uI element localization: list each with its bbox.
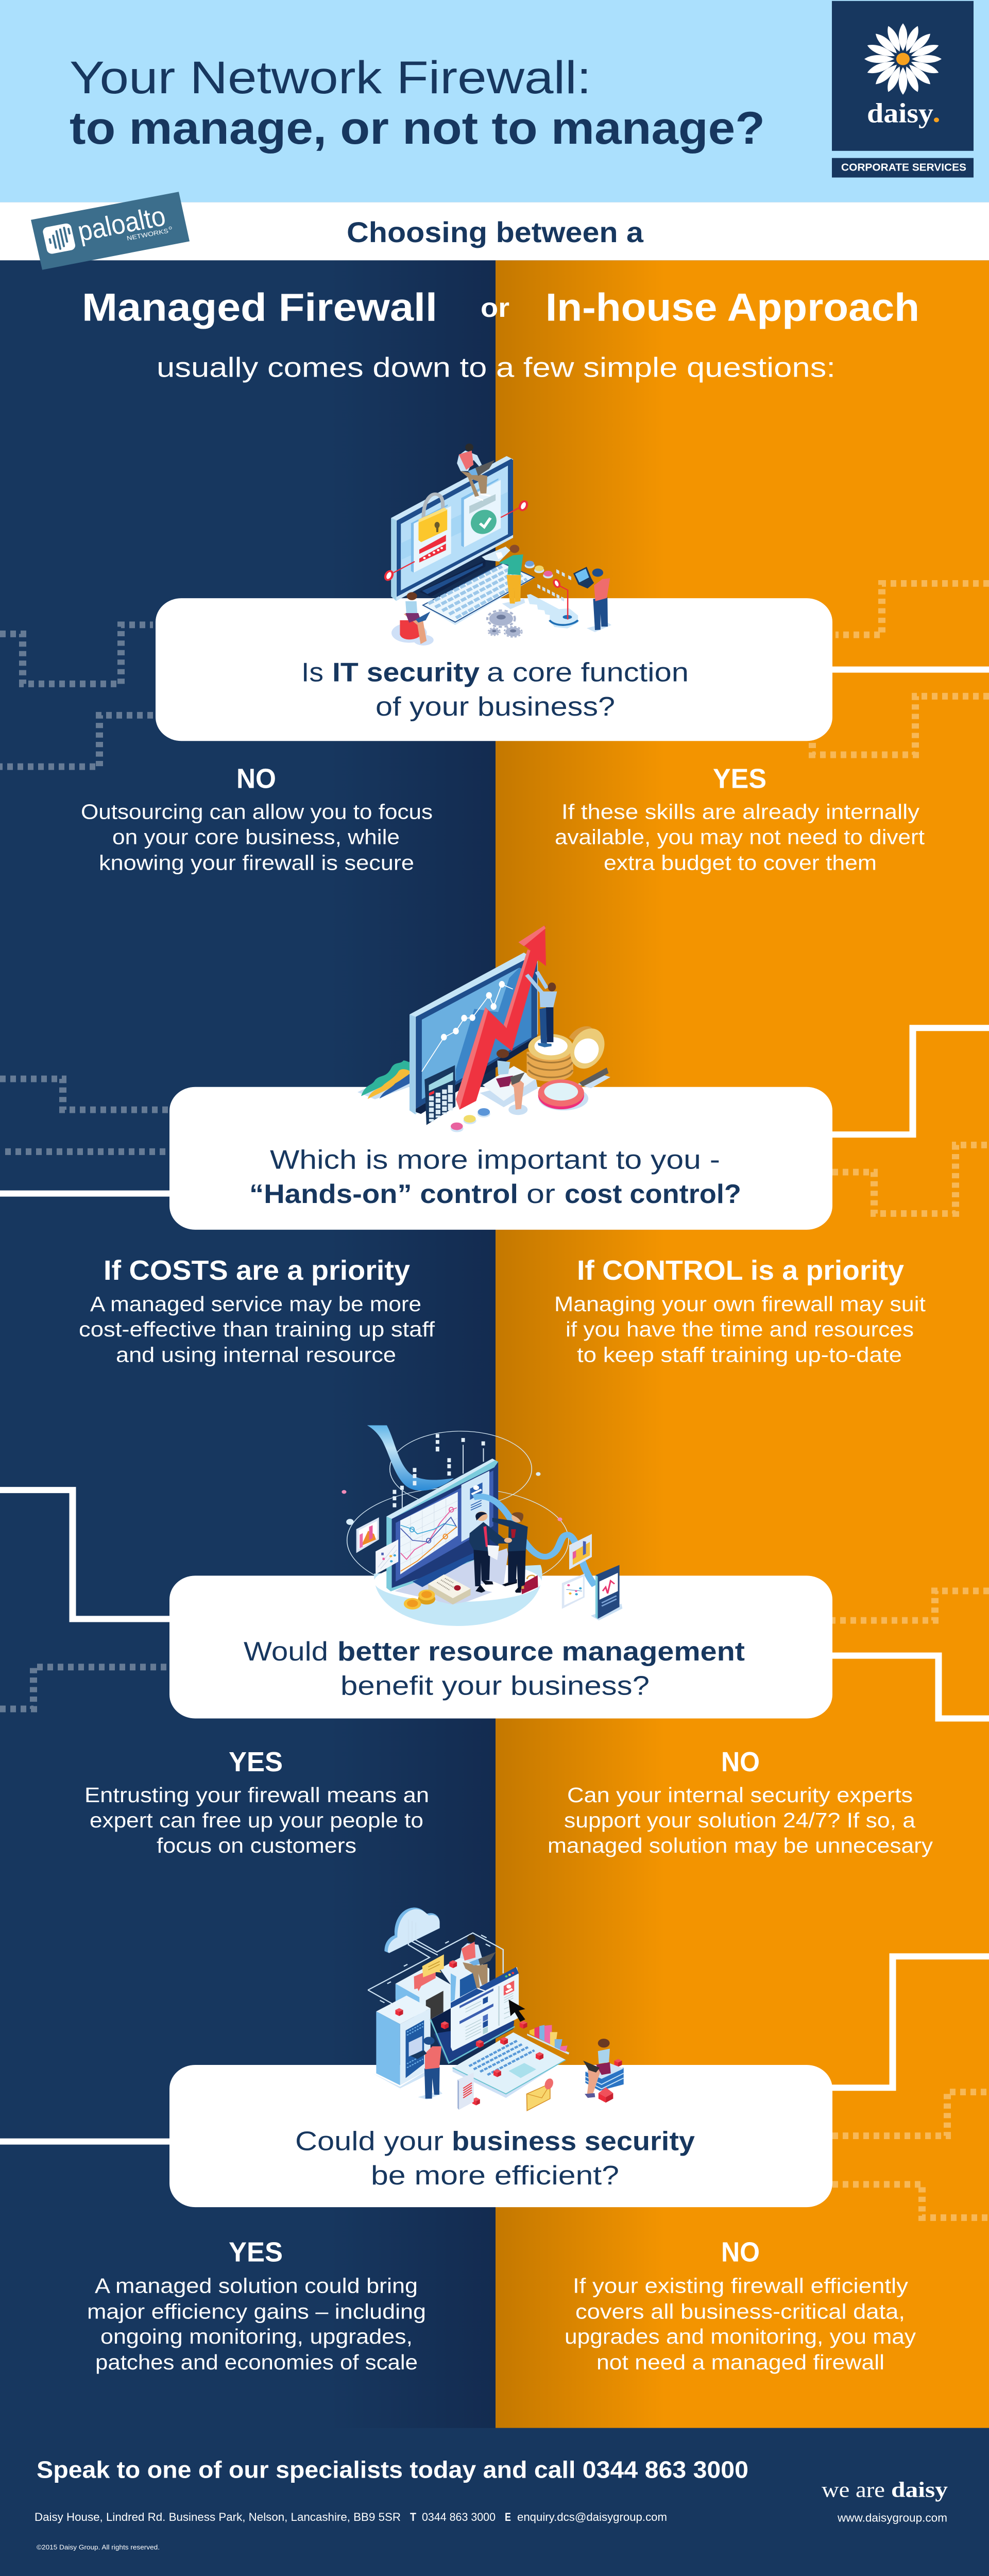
question text: Would: [244, 1637, 328, 1666]
panel: answer if control: [554, 1255, 926, 1366]
subtitle: choosing between: Choosing between a: [347, 217, 644, 249]
icon: orbit rings: [347, 1431, 569, 1593]
contact details: Daisy House, Lindred Rd. Business Park, Nelson, Lancashire, BB9 5SR: [35, 2511, 401, 2523]
icon: bar chart: [527, 2025, 569, 2055]
icon: cursor arrow: [508, 1999, 525, 2022]
question text: or: [526, 1179, 555, 1209]
panel: answer YES: YES: [713, 763, 766, 794]
card: [156, 598, 832, 741]
icon: woman's paper stack: [480, 1066, 538, 1107]
question text: of your business?: [376, 692, 615, 722]
icon: person placing arrow: [526, 972, 557, 1047]
icon: red cubes: [395, 1960, 622, 2105]
card: [169, 1087, 832, 1230]
logo: daisy: CORPORATE SERVICES: [841, 162, 966, 173]
panel: answer no 4: NO: [721, 2236, 760, 2267]
icon: gold coins: [404, 1589, 435, 1609]
panel: answer if control: if you have the time and resources: [566, 1317, 914, 1341]
icon: calculator: [424, 1065, 455, 1125]
panel: answer no 4: not need a managed firewall: [596, 2351, 884, 2374]
icon: circuit lines: [368, 1920, 503, 2004]
question text: [244, 1637, 745, 1701]
panel: answer if control: Managing your own firewall may suit: [554, 1292, 926, 1315]
question text: Is: [301, 658, 323, 687]
footer: [0, 2428, 989, 2576]
panel: answer if costs: [79, 1255, 435, 1366]
panel: answer YES: If these skills are already internally: [561, 800, 920, 823]
panel: answer YES: [555, 763, 925, 874]
contact details: 0344 863 3000: [422, 2511, 496, 2523]
panel: answer yes 4: ongoing monitoring, upgrades,: [100, 2325, 413, 2348]
icon: woman on server stack: [583, 2039, 624, 2098]
icon: person on monitor: [457, 444, 494, 501]
panel: answer no 3: managed solution may be unnecesary: [548, 1834, 933, 1857]
illustration: handshake and analytics: [342, 1425, 622, 1626]
panel: answer YES: available, you may not need to divert: [555, 825, 925, 849]
panel: answer yes 3: Entrusting your firewall means an: [84, 1784, 429, 1807]
icon: phone: [591, 1565, 622, 1620]
panel: answer yes 3: expert can free up your people to: [90, 1809, 423, 1832]
icon: briefcase: [521, 1575, 538, 1594]
panel: question 3: [169, 1575, 832, 1718]
icon: back servers: [396, 1954, 489, 2022]
column headings: or: [481, 293, 509, 323]
logo: palo alto networks badge: paloalto: [75, 200, 168, 247]
panel: answer yes 3: focus on customers: [157, 1834, 356, 1857]
panel: answer yes 3: YES: [229, 1746, 283, 1777]
panel: answer if control: If CONTROL is a priority: [577, 1255, 904, 1285]
panel: answer if costs: cost-effective than training up staff: [79, 1317, 435, 1341]
icon: ribbon to phone: [473, 1497, 595, 1585]
tagline: we are daisy: daisy: [891, 2478, 948, 2502]
icon: floating dots: [342, 1472, 562, 1525]
question text: benefit your business?: [340, 1671, 650, 1701]
icon: woman on stool: [391, 592, 434, 646]
illustration: growth chart, coins and people: [357, 926, 610, 1132]
panel: answer no 4: [565, 2236, 916, 2374]
question text: cost control?: [565, 1179, 741, 1209]
column headings: In-house Approach: [545, 285, 919, 329]
panel: question 4: [169, 2065, 832, 2207]
question text: [295, 2126, 695, 2190]
icon: padlock: [418, 494, 447, 563]
icon: glass bowl: [374, 1548, 542, 1626]
copyright: ©2015 Daisy Group. All rights reserved.: [37, 2544, 160, 2551]
panel: answer if control: to keep staff training up-to-date: [577, 1343, 902, 1366]
icon: data squares: [393, 1434, 485, 1507]
question text: business security: [452, 2126, 695, 2156]
icon: magnifying glass: [538, 1067, 610, 1110]
icon: monitor with line chart: [410, 953, 538, 1114]
panel: answer yes 4: patches and economies of scale: [95, 2351, 418, 2374]
icon: area charts: [357, 1060, 410, 1099]
icon: analytics monitor: [386, 1459, 498, 1591]
tagline: we are daisy: [822, 2478, 948, 2502]
panel: answer if costs: A managed service may be more: [90, 1292, 421, 1315]
logo: palo alto networks badge: NETWORKS: [126, 227, 169, 242]
icon: certificate: [428, 1574, 471, 1604]
icon: mini charts: [356, 1517, 592, 1609]
panel: answer yes 4: YES: [229, 2236, 283, 2267]
column headings: Managed Firewall: [82, 285, 437, 329]
icon: envelope: [526, 2078, 555, 2111]
panel: answer no 4: If your existing firewall efficiently: [573, 2274, 909, 2297]
panel: answer no 3: [548, 1746, 933, 1857]
question text: “Hands-on” control: [249, 1179, 518, 1209]
contact details: T: [410, 2511, 416, 2523]
icon: coins: [526, 1025, 610, 1081]
panel: answer NO: Outsourcing can allow you to focus: [81, 800, 433, 823]
icon: key: [527, 579, 578, 629]
question text: better resource management: [337, 1637, 745, 1666]
title: Your Network Firewall:: [70, 52, 591, 103]
icon: red pins: [384, 500, 528, 581]
call to action: Speak to one of our specialists today and call 0344 863 3000: [37, 2456, 748, 2483]
illustration: servers, cloud and laptop: [368, 1908, 624, 2111]
panel: answer no 4: covers all business-critical data,: [575, 2300, 905, 2323]
card: [169, 1575, 832, 1718]
icon: speech bubbles: [414, 1954, 444, 1991]
icon: palo alto mark: [42, 223, 76, 255]
panel: answer NO: NO: [236, 763, 276, 794]
tagline: we are daisy: we are: [822, 2478, 885, 2502]
question text: a core function: [487, 658, 689, 687]
panel: answer YES: extra budget to cover them: [604, 851, 877, 874]
card: [169, 2065, 832, 2207]
panel: answer if costs: If COSTS are a priority: [104, 1255, 410, 1285]
icon: woman with laptop: [496, 1049, 527, 1115]
question text: be more efficient?: [371, 2161, 619, 2190]
icon: coloured buttons: [451, 1108, 490, 1132]
panel: answer yes 4: major efficiency gains – including: [87, 2300, 426, 2323]
panel: answer no 3: support your solution 24/7? If so, a: [564, 1809, 915, 1832]
contact details: enquiry.dcs@daisygroup.com: [517, 2511, 667, 2523]
icon: two men shaking hands: [469, 1512, 528, 1592]
icon: upper ribbon: [367, 1425, 454, 1490]
panel: answer if costs: and using internal resource: [116, 1343, 396, 1366]
icon: person with tablet: [496, 545, 553, 609]
question text: Which is more important to you -: [270, 1145, 720, 1175]
header band: [0, 0, 989, 260]
icon: person with laptop: [573, 567, 611, 632]
panel: question 2: [169, 1087, 832, 1230]
icon: red rising arrow: [456, 926, 546, 1110]
panel: answer yes 4: A managed solution could bring: [95, 2274, 418, 2297]
icon: keyboard: [419, 547, 534, 625]
column headings: [82, 285, 919, 383]
icon: daisy flower: [864, 23, 942, 95]
title: [70, 52, 765, 154]
panel: answer no 3: Can your internal security experts: [567, 1784, 913, 1807]
icon: front server: [372, 1995, 431, 2089]
logo: daisy: daisy: [867, 98, 933, 129]
panel: answer NO: knowing your firewall is secure: [99, 851, 414, 874]
panel: answer NO: [81, 763, 433, 874]
question text: [249, 1145, 741, 1209]
icon: gears: [487, 611, 522, 637]
column headings: usually comes down to a few simple questions:: [157, 352, 835, 383]
contact details: E: [505, 2511, 511, 2523]
panel: answer yes 3: [84, 1746, 429, 1857]
panel: answer yes 4: [87, 2236, 426, 2374]
icon: big red cube: [599, 2087, 613, 2103]
panel: answer no 4: upgrades and monitoring, you may: [565, 2325, 916, 2348]
connector lines: [0, 670, 989, 2142]
title: to manage, or not to manage?: [70, 102, 765, 154]
logo: daisy: [832, 1, 974, 178]
logo: palo alto networks badge: [31, 192, 190, 270]
icon: browser window: [451, 1967, 519, 2051]
panel: answer no 3: NO: [721, 1746, 760, 1777]
icon: mobile device: [457, 2073, 474, 2110]
icon: cloud: [384, 1908, 440, 1953]
panel: question 1: [156, 598, 832, 741]
question text: IT security: [332, 658, 480, 687]
question text: [301, 658, 689, 722]
panel: answer NO: on your core business, while: [112, 825, 400, 849]
question text: Could your: [295, 2126, 444, 2156]
contact details: [35, 2511, 667, 2523]
icon: laptop: [431, 2008, 566, 2098]
website: www.daisygroup.com: [837, 2512, 947, 2524]
icon: person sitting on server: [460, 1935, 496, 1991]
icon: monitor: [391, 456, 513, 601]
illustration: security monitor and people: [384, 444, 611, 646]
icon: technician: [410, 2036, 442, 2099]
